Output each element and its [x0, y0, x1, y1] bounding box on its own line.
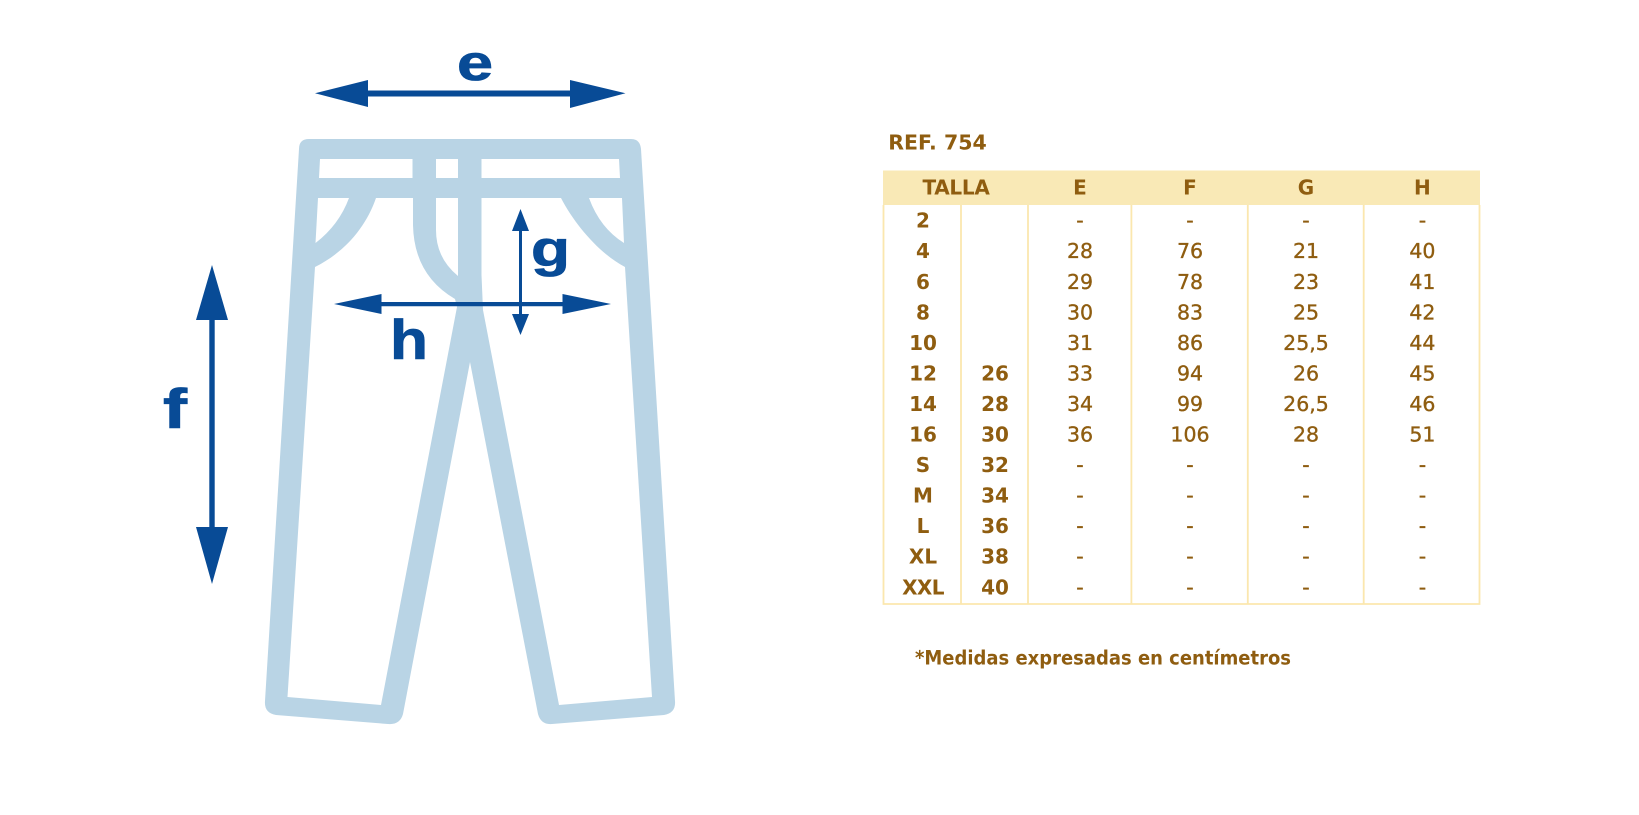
trousers outline: [265, 139, 675, 724]
size column: L: [917, 514, 930, 538]
size column: S: [916, 453, 930, 477]
column H values: -: [1419, 575, 1426, 599]
column F values: -: [1186, 484, 1194, 508]
column G values: -: [1302, 453, 1310, 477]
table header: E: [1073, 176, 1087, 200]
column H values: 46: [1409, 392, 1435, 416]
table header: [883, 170, 1480, 205]
table header: G: [1298, 176, 1314, 200]
column H values: 51: [1409, 422, 1435, 446]
column H values: -: [1419, 514, 1426, 538]
column G values: -: [1302, 209, 1310, 233]
numeric size column: [981, 361, 1009, 599]
numeric size column: 30: [981, 422, 1009, 446]
column E values: 30: [1067, 300, 1093, 324]
column H values: 45: [1409, 361, 1435, 385]
arrow: h (hip width): [334, 294, 611, 314]
column G values: -: [1302, 484, 1310, 508]
size column: 14: [909, 392, 937, 416]
numeric size column: 36: [981, 514, 1009, 538]
size column: [902, 209, 945, 599]
column H values: -: [1419, 484, 1426, 508]
column F values: 94: [1177, 361, 1203, 385]
column E values: 29: [1067, 270, 1093, 294]
size column: XXL: [902, 575, 945, 599]
size column: 12: [909, 361, 937, 385]
arrow: f (leg length): [196, 265, 228, 584]
column F values: 106: [1170, 422, 1210, 446]
size column: 16: [909, 422, 937, 446]
column F values: -: [1186, 575, 1194, 599]
column E values: -: [1076, 453, 1084, 477]
column E values: 28: [1067, 239, 1093, 263]
column H values: -: [1419, 209, 1426, 233]
arrow: g (rise): [512, 209, 529, 335]
footnote: *Medidas expresadas en centímetros: [915, 646, 1291, 670]
column H values: -: [1419, 453, 1426, 477]
numeric size column: 32: [981, 453, 1009, 477]
column F values: 86: [1177, 331, 1203, 355]
column G values: 28: [1293, 422, 1319, 446]
size column: 4: [916, 239, 930, 263]
column F values: -: [1186, 514, 1194, 538]
column H values: 42: [1409, 300, 1435, 324]
column E values: -: [1076, 514, 1084, 538]
column E values: 34: [1067, 392, 1093, 416]
column E values: [1067, 209, 1093, 599]
column G values: 21: [1293, 239, 1319, 263]
numeric size column: 28: [981, 392, 1009, 416]
column E values: 31: [1067, 331, 1093, 355]
column F values: 76: [1177, 239, 1203, 263]
size column: 6: [916, 270, 930, 294]
column G values: 23: [1293, 270, 1319, 294]
column E values: -: [1076, 575, 1084, 599]
column G values: 26: [1293, 361, 1319, 385]
numeric size column: 38: [981, 545, 1009, 569]
size column: M: [913, 484, 933, 508]
label: h: h: [390, 308, 428, 371]
column G values: -: [1302, 575, 1310, 599]
table header: H: [1414, 176, 1431, 200]
label: g: g: [531, 221, 570, 277]
size column: XL: [909, 545, 937, 569]
column E values: 36: [1067, 422, 1093, 446]
column E values: -: [1076, 484, 1084, 508]
numeric size column: 26: [981, 361, 1009, 385]
label: f: f: [163, 377, 187, 440]
column G values: -: [1302, 514, 1310, 538]
column H values: 40: [1409, 239, 1435, 263]
column G values: 26,5: [1283, 392, 1329, 416]
column G values: 25: [1293, 300, 1319, 324]
column H values: 41: [1409, 270, 1435, 294]
column E values: -: [1076, 209, 1084, 233]
column G values: [1283, 209, 1329, 599]
size column: 10: [909, 331, 937, 355]
reference heading: REF. 754: [888, 130, 987, 154]
column E values: -: [1076, 545, 1084, 569]
column F values: 99: [1177, 392, 1203, 416]
column H values: -: [1419, 545, 1426, 569]
column E values: 33: [1067, 361, 1093, 385]
column F values: -: [1186, 545, 1194, 569]
table grid: [884, 205, 1480, 604]
numeric size column: 40: [981, 575, 1009, 599]
column F values: 78: [1177, 270, 1203, 294]
column F values: -: [1186, 453, 1194, 477]
column F values: -: [1186, 209, 1194, 233]
table header: F: [1183, 176, 1197, 200]
label: e: e: [457, 35, 493, 91]
size table: [883, 170, 1480, 604]
arrow: e (waist width): [315, 80, 626, 108]
numeric size column: 34: [981, 484, 1009, 508]
column H values: [1409, 209, 1435, 599]
column F values: [1170, 209, 1210, 599]
column F values: 83: [1177, 300, 1203, 324]
table header: TALLA: [922, 176, 990, 200]
size column: 2: [916, 209, 930, 233]
size column: 8: [916, 300, 930, 324]
column H values: 44: [1409, 331, 1435, 355]
column G values: 25,5: [1283, 331, 1329, 355]
column G values: -: [1302, 545, 1310, 569]
